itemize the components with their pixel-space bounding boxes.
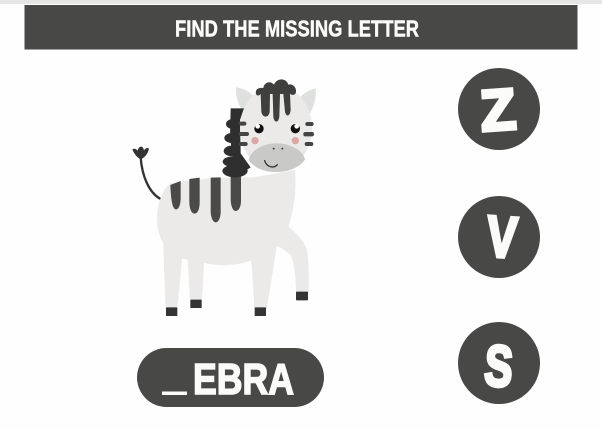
letter option: S: S xyxy=(483,333,515,400)
smile xyxy=(265,161,277,167)
letter option: V xyxy=(458,196,540,278)
zebra tail xyxy=(132,147,160,199)
letter option: V: V xyxy=(485,204,519,271)
letter option: S xyxy=(458,322,540,404)
title text: FIND THE MISSING LETTER xyxy=(175,16,419,42)
illustration: zebra xyxy=(132,79,316,316)
title banner xyxy=(24,5,578,50)
zebra body and legs xyxy=(157,170,309,308)
letter option: Z: Z xyxy=(478,77,518,144)
word text: EBRA xyxy=(193,355,294,404)
cheeks xyxy=(251,137,259,144)
forelock xyxy=(256,79,296,122)
ears xyxy=(236,87,257,113)
zebra feet xyxy=(166,292,308,316)
eyes xyxy=(254,124,264,133)
cheek stripes xyxy=(238,122,314,146)
zebra head xyxy=(222,79,316,177)
mane xyxy=(222,108,251,177)
letter option: Z xyxy=(458,68,540,150)
muzzle xyxy=(249,143,305,172)
word pill xyxy=(137,348,324,407)
blank underscore xyxy=(162,392,187,395)
zebra body stripes xyxy=(170,176,241,222)
